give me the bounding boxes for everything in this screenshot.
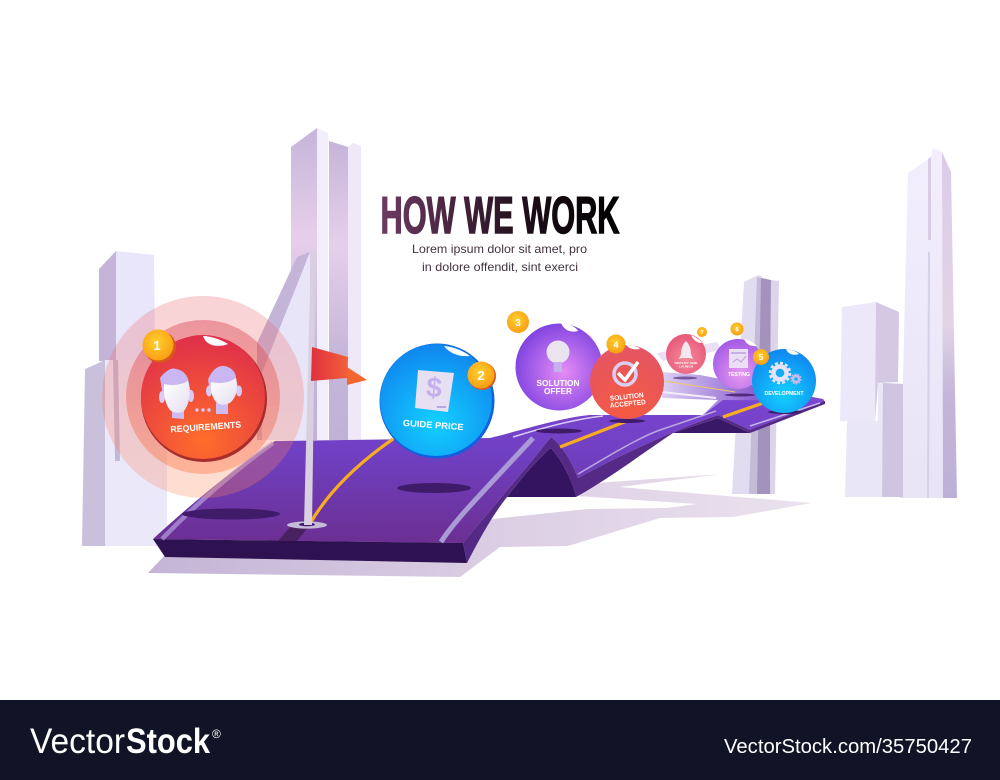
badge 7: 7 <box>701 330 704 336</box>
badge 5: 5 <box>759 353 764 362</box>
icon: two people <box>159 366 242 419</box>
road: winding surface <box>153 400 825 543</box>
badge 2: 2 <box>477 368 485 383</box>
step 7 deploy and launch sphere <box>666 334 706 374</box>
building: right blocks <box>840 302 903 497</box>
ground shadow of road <box>148 474 812 577</box>
road far section <box>657 342 825 415</box>
badge 7 <box>697 327 707 337</box>
footer logo <box>30 722 221 761</box>
subtitle <box>412 242 587 274</box>
shadows under spheres <box>182 376 802 520</box>
badge 6 <box>730 322 744 336</box>
step 3 solution offer sphere: SOLUTION <box>536 379 580 388</box>
flag <box>311 347 367 385</box>
step 4 solution accepted sphere: SOLUTION <box>610 392 644 403</box>
road centre line <box>311 403 763 522</box>
badge 3 <box>507 311 529 333</box>
footer logo: Vector <box>30 722 125 761</box>
badge 4 <box>606 334 626 354</box>
icon: light bulb <box>546 340 570 372</box>
step 6 testing sphere: TESTING <box>728 372 750 378</box>
badge 2 <box>468 362 496 390</box>
building: tall tower behind flag <box>257 128 361 440</box>
road: arch walls <box>463 401 825 563</box>
step 4 solution accepted sphere: ACCEPTED <box>610 399 646 410</box>
halo rings around step 1 <box>102 296 304 498</box>
badge 5 <box>753 349 769 365</box>
road edge lines <box>162 403 820 542</box>
icon: test sheet <box>729 349 748 368</box>
step 3 solution offer sphere <box>516 323 602 410</box>
step 5 development sphere <box>752 349 816 413</box>
step 7 deploy and launch sphere: DEPLOY AND <box>674 361 698 365</box>
badge 4: 4 <box>613 340 619 350</box>
footer logo: ® <box>212 727 221 741</box>
step 4 solution accepted sphere <box>590 345 664 419</box>
building: right tall tower <box>900 148 957 498</box>
step 6 testing sphere <box>713 339 763 389</box>
step 5 development sphere: DEVELOPMENT <box>764 391 804 397</box>
step 2 guide price sphere: GUIDE PRICE <box>402 418 464 432</box>
badge 6: 6 <box>735 328 739 334</box>
subtitle: in dolore offendit, sint exerci <box>422 260 578 274</box>
badge 1 <box>142 330 176 363</box>
badge 1: 1 <box>153 338 161 353</box>
step 3 solution offer sphere: OFFER <box>544 387 572 396</box>
footer logo: Stock <box>126 722 210 761</box>
step 1 requirements sphere: REQUIREMENTS <box>170 420 242 434</box>
footer bar <box>0 700 1000 780</box>
badge 3: 3 <box>515 318 521 329</box>
step 1 requirements sphere <box>141 335 267 462</box>
icon: gears <box>770 363 801 384</box>
flag pole <box>278 250 327 541</box>
step 2 guide price sphere <box>380 344 494 458</box>
building: far left block <box>82 360 167 546</box>
road: front wall <box>153 539 467 563</box>
step 7 deploy and launch sphere: LAUNCH <box>679 364 693 368</box>
building: centre-right tower <box>732 275 779 494</box>
icon: rocket <box>679 341 693 359</box>
title: HOW WE WORK <box>380 187 620 245</box>
icon: check mark <box>614 362 638 385</box>
icon: price sheet: $ <box>425 371 444 404</box>
subtitle: Lorem ipsum dolor sit amet, pro <box>412 242 587 256</box>
footer image id: VectorStock.com/35750427 <box>724 736 972 758</box>
building: left tower <box>99 251 155 361</box>
